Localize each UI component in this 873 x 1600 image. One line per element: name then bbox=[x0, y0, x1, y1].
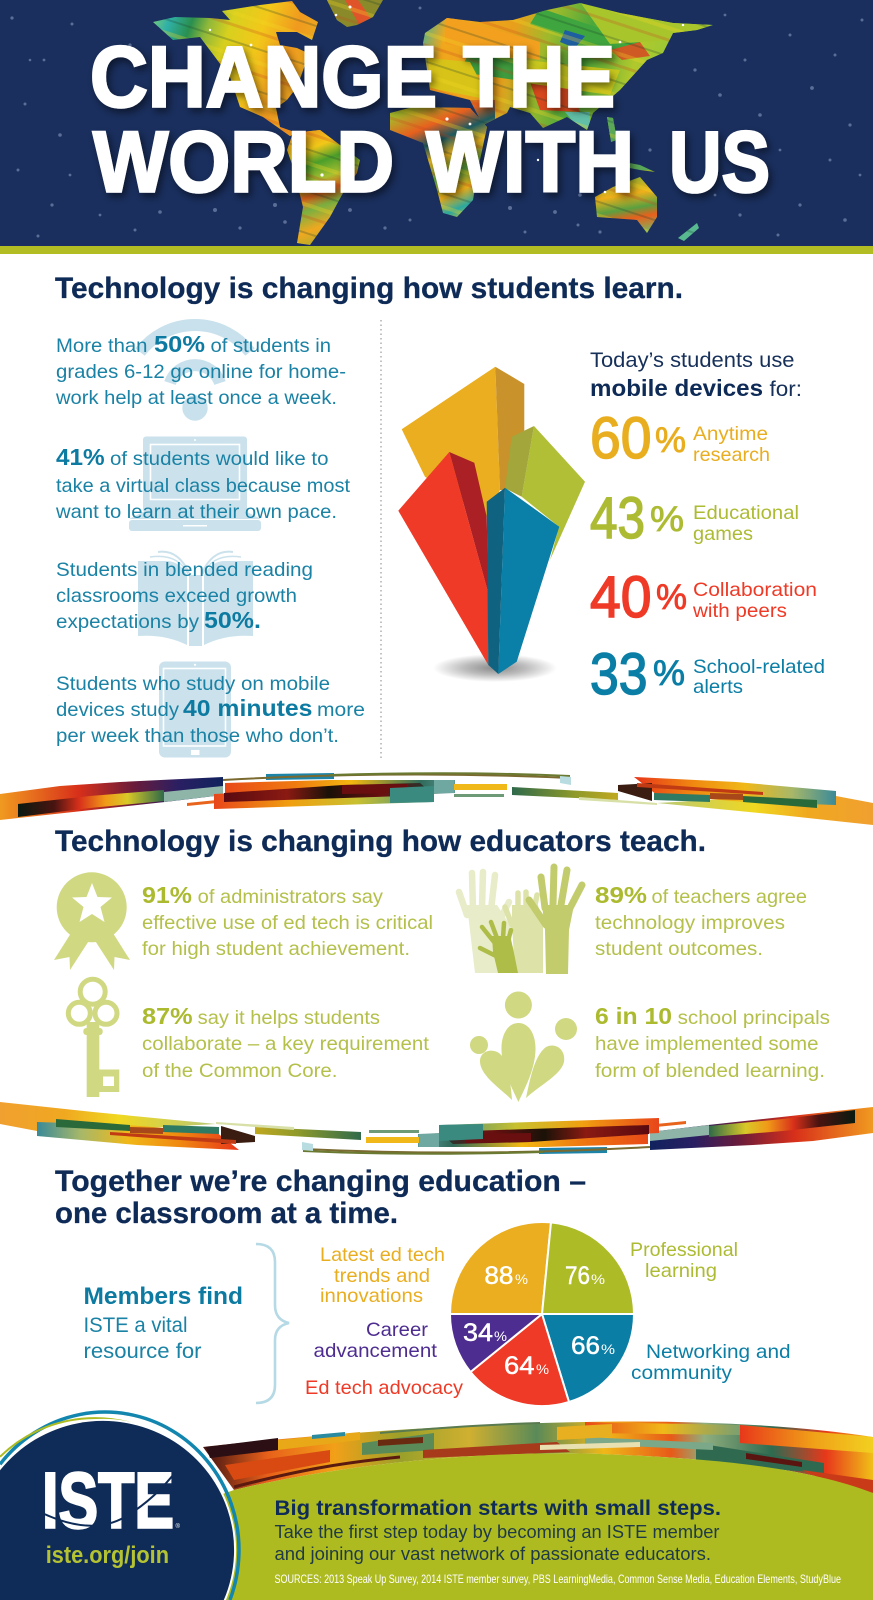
world map bbox=[140, 0, 720, 250]
text block: 89%: of teachers agree bbox=[652, 886, 807, 908]
heading: together: one classroom at a time. bbox=[55, 1197, 398, 1230]
text block: members find: ISTE a vital bbox=[84, 1314, 188, 1337]
mobile devices heading: Today’s students use bbox=[590, 348, 794, 372]
text block: 91% bbox=[142, 882, 433, 960]
text block: student stats bbox=[55, 331, 365, 747]
stat: 43% educational games: 43 bbox=[590, 486, 645, 551]
pie labels: Professional bbox=[630, 1239, 738, 1261]
stat: 33% school-related alerts bbox=[590, 642, 825, 707]
stat: 43% educational games: games bbox=[693, 523, 753, 545]
title: CHANGE bbox=[90, 30, 437, 126]
pie labels bbox=[305, 1239, 791, 1399]
stat: 60% anytime research bbox=[590, 406, 770, 471]
pie chart: % bbox=[494, 1328, 507, 1344]
stat: 40% collaboration with peers: 40 bbox=[590, 565, 652, 630]
mobile devices heading bbox=[590, 348, 802, 401]
pie labels: learning bbox=[645, 1260, 717, 1282]
pie labels: Ed tech advocacy bbox=[305, 1377, 463, 1399]
stat: 33% school-related alerts: alerts bbox=[693, 676, 743, 698]
stat: 60% anytime research: % bbox=[655, 421, 686, 460]
pie chart: 34 bbox=[463, 1319, 493, 1347]
icon: key bbox=[68, 979, 119, 1097]
title bbox=[90, 30, 770, 210]
pie labels: advancement bbox=[314, 1340, 438, 1362]
logo: ISTE: ® bbox=[176, 1523, 180, 1530]
text block: 91%: of administrators say bbox=[198, 886, 383, 908]
logo badge bbox=[0, 1412, 239, 1600]
pie chart: % bbox=[591, 1271, 605, 1287]
text block: members find: resource for bbox=[84, 1340, 202, 1363]
stat: 40% collaboration with peers: % bbox=[656, 578, 687, 617]
url: iste.org/join bbox=[46, 1542, 169, 1569]
text block: 87%: say it helps students bbox=[198, 1007, 380, 1029]
text block: 91%: 91% bbox=[142, 882, 192, 908]
text block: student stats: 50% bbox=[154, 331, 205, 357]
icon: brace bbox=[256, 1244, 289, 1403]
pie chart: % bbox=[515, 1271, 528, 1287]
stat: 40% collaboration with peers: with peers bbox=[692, 600, 787, 622]
text block: student stats: more bbox=[317, 699, 365, 721]
text block: student stats: of students in bbox=[210, 335, 331, 357]
text block: student stats: devices study bbox=[56, 699, 179, 721]
pie labels: community bbox=[631, 1362, 732, 1384]
text block: student stats: 50%. bbox=[204, 607, 261, 633]
title: THE bbox=[463, 30, 615, 126]
icon: people bbox=[470, 992, 577, 1102]
ribbon: upper bbox=[0, 773, 873, 825]
text block: 89% bbox=[595, 882, 807, 960]
text block: 6 in 10: 6 in 10 bbox=[595, 1003, 672, 1029]
right hand bbox=[529, 867, 582, 974]
stat: 40% collaboration with peers: Collaboration bbox=[693, 579, 817, 601]
pie labels: Latest ed tech bbox=[320, 1244, 445, 1266]
text block: 89%: student outcomes. bbox=[595, 938, 763, 960]
left hand bbox=[459, 872, 515, 973]
footer panel bbox=[0, 1412, 873, 1600]
stat: 43% educational games bbox=[590, 486, 799, 551]
stat: 40% collaboration with peers bbox=[590, 565, 817, 630]
stat: 33% school-related alerts: % bbox=[653, 654, 685, 693]
stat: 43% educational games: % bbox=[650, 500, 684, 539]
text block: members find bbox=[84, 1283, 243, 1363]
heading: together bbox=[55, 1165, 586, 1230]
pie chart: 88 bbox=[484, 1262, 513, 1290]
stars bbox=[10, 6, 863, 238]
text block: 6 in 10 bbox=[595, 1003, 830, 1082]
text block: 87%: 87% bbox=[142, 1003, 193, 1029]
text block: 87%: of the Common Core. bbox=[142, 1060, 338, 1082]
icon: laptop bbox=[129, 436, 261, 531]
text block: student stats: 41% bbox=[56, 444, 105, 470]
text block: student stats: More than bbox=[56, 335, 148, 357]
icon: wifi bbox=[140, 325, 250, 421]
text block: student stats: of students would like to bbox=[110, 448, 329, 470]
heading: educators teach: Technology is changing how educators teach. bbox=[55, 825, 706, 858]
text block: student stats: classrooms exceed growth bbox=[56, 585, 297, 607]
small hand bbox=[480, 922, 518, 973]
pie labels: trends and bbox=[334, 1265, 430, 1287]
text block: student stats: want to learn at their own pace. bbox=[55, 501, 337, 523]
text block: student stats: Students who study on mobile bbox=[56, 673, 330, 695]
pie labels: innovations bbox=[320, 1285, 423, 1307]
footer text: Big transformation starts with small steps. bbox=[274, 1496, 721, 1520]
text block: student stats: grades 6-12 go online for home- bbox=[56, 361, 346, 383]
title: WITH bbox=[426, 114, 634, 210]
middle hand bbox=[505, 892, 543, 973]
stat: 60% anytime research: Anytime bbox=[693, 423, 768, 445]
text block: student stats: 40 minutes bbox=[183, 695, 312, 721]
stat: 33% school-related alerts: School-related bbox=[693, 656, 825, 678]
icon: crystal graphic bbox=[398, 367, 585, 682]
ribbon: lower bbox=[0, 1102, 873, 1154]
stat: 60% anytime research: 60 bbox=[590, 406, 652, 471]
text block: student stats: take a virtual class because most bbox=[56, 475, 351, 497]
text block: 6 in 10: have implemented some bbox=[595, 1033, 818, 1055]
text block: 91%: effective use of ed tech is critical bbox=[142, 912, 433, 934]
text block: student stats: Students in blended reading bbox=[56, 559, 313, 581]
text block: 89%: technology improves bbox=[595, 912, 785, 934]
text block: 6 in 10: school principals bbox=[678, 1007, 830, 1029]
header panel bbox=[0, 0, 873, 250]
title: US bbox=[669, 114, 770, 210]
heading: students learn: Technology is changing how students learn. bbox=[55, 272, 683, 305]
heading: together: Together we’re changing education – bbox=[55, 1165, 586, 1198]
icon: tablet bbox=[159, 662, 231, 758]
icon: book bbox=[138, 552, 253, 646]
green area bbox=[200, 1453, 873, 1600]
footer text: and joining our vast network of passionate educators. bbox=[274, 1544, 711, 1564]
footer text bbox=[274, 1496, 841, 1586]
text block: 91%: for high student achievement. bbox=[142, 938, 410, 960]
pie chart bbox=[450, 1222, 634, 1406]
mobile devices heading: for: bbox=[770, 377, 802, 401]
pie labels: Career bbox=[366, 1319, 429, 1341]
text block: 89%: 89% bbox=[595, 882, 647, 908]
mobile devices heading: mobile devices bbox=[590, 375, 763, 401]
stat: 43% educational games: Educational bbox=[693, 502, 799, 524]
text block: members find: Members find bbox=[84, 1283, 243, 1310]
icon: raised hands bbox=[459, 867, 582, 974]
text block: student stats: work help at least once a week. bbox=[55, 387, 337, 409]
stat: 33% school-related alerts: 33 bbox=[590, 642, 648, 707]
footer ribbon bbox=[203, 1422, 873, 1493]
stat: 60% anytime research: research bbox=[693, 444, 770, 466]
text block: 87% bbox=[142, 1003, 430, 1082]
text block: 6 in 10: form of blended learning. bbox=[595, 1060, 825, 1082]
footer text: Take the first step today by becoming an ISTE member bbox=[274, 1522, 720, 1542]
pie chart: 64 bbox=[504, 1352, 535, 1380]
text block: student stats: expectations by bbox=[56, 611, 199, 633]
pie chart: % bbox=[536, 1361, 549, 1377]
pie labels: Networking and bbox=[646, 1341, 791, 1363]
pie chart: % bbox=[601, 1341, 615, 1357]
pie chart: 76 bbox=[565, 1262, 590, 1290]
pie chart: 66 bbox=[571, 1332, 600, 1360]
text block: 87%: collaborate – a key requirement bbox=[142, 1033, 430, 1055]
text block: student stats: per week than those who don’t. bbox=[56, 725, 339, 747]
title: WORLD bbox=[93, 114, 394, 210]
icon: award ribbon bbox=[54, 872, 130, 970]
logo: ISTE: ISTE bbox=[42, 1456, 174, 1544]
